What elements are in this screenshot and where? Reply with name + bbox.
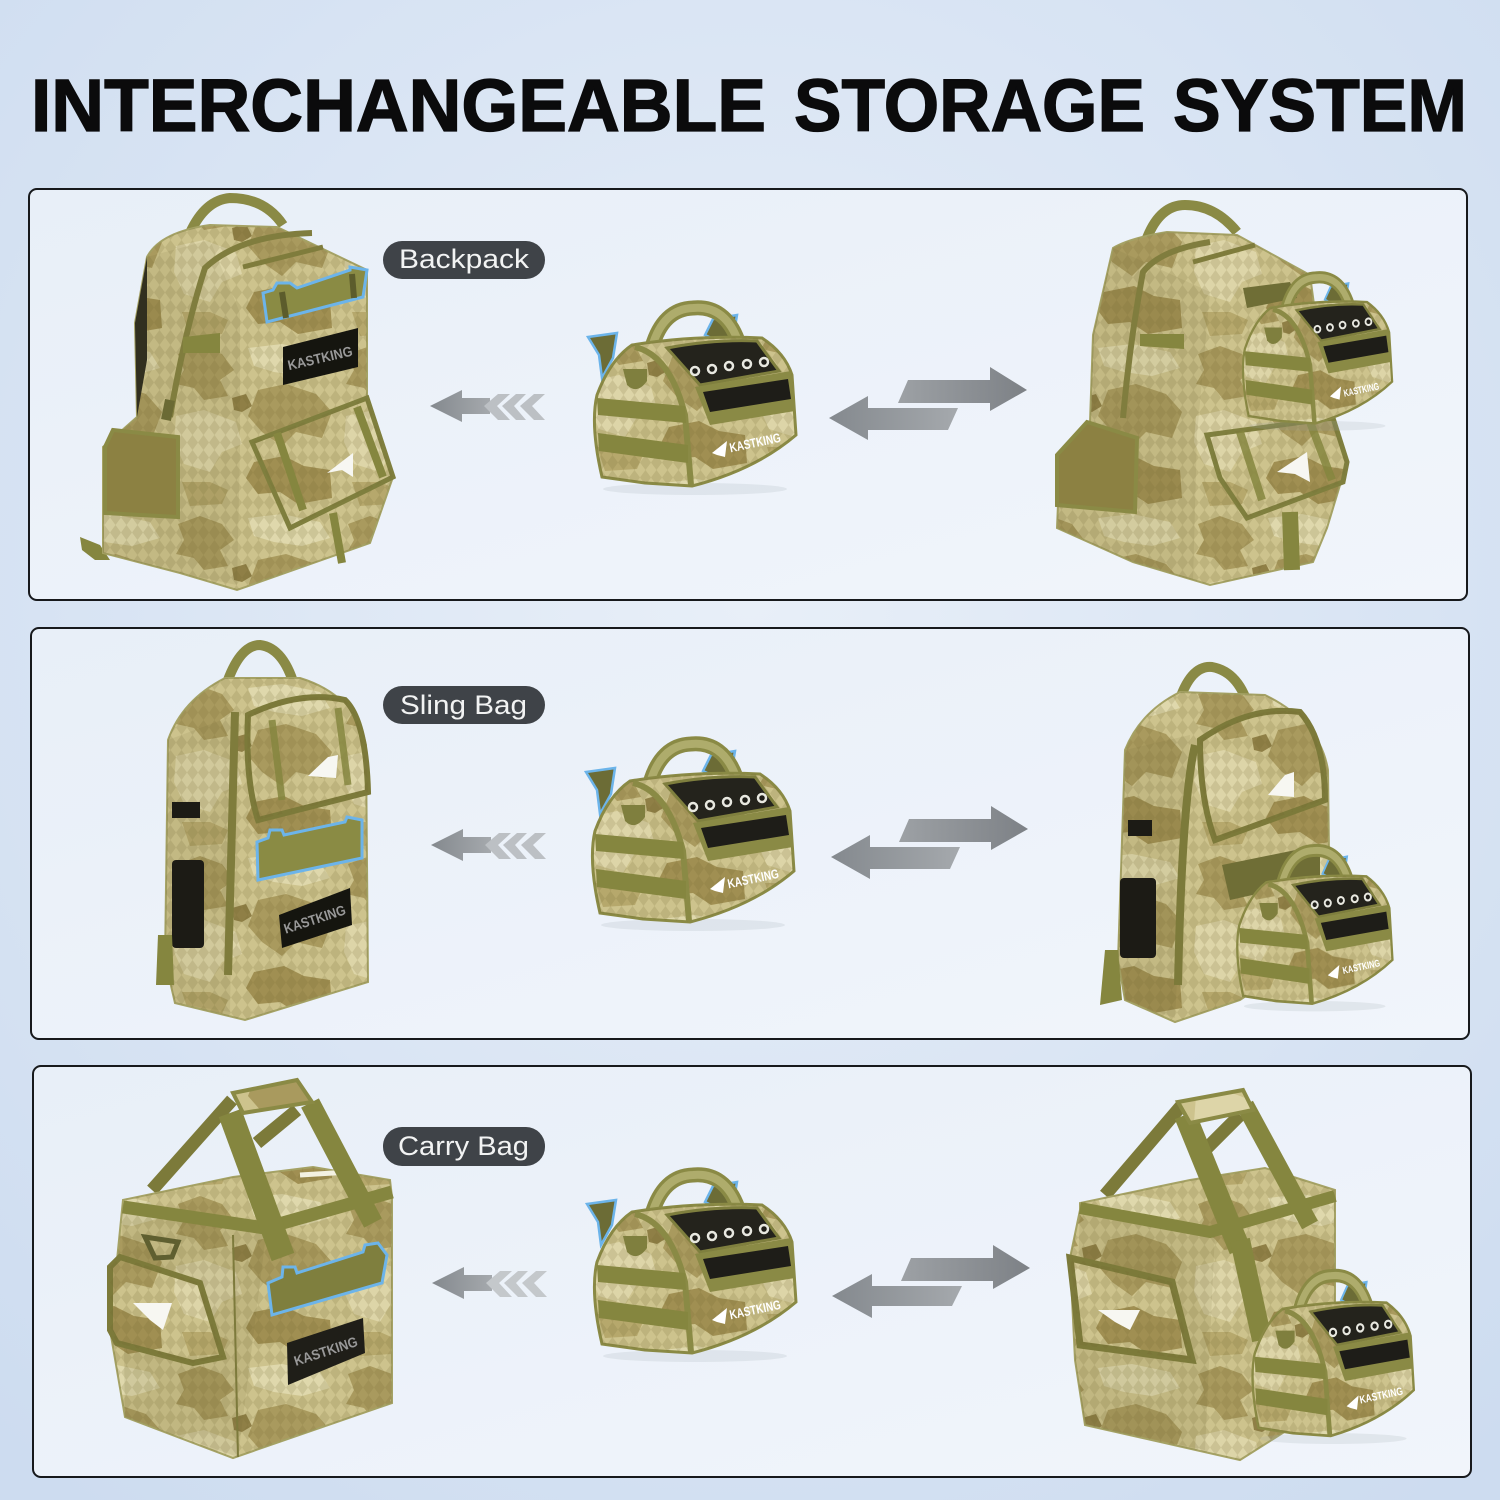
removable pouch: KASTKING [726,866,780,891]
sling bag with pouch attached [1100,667,1392,1022]
panel: sling bag [31,628,1469,1039]
sling bag before attaching [156,645,368,1020]
arrow: interchange [832,1245,1030,1318]
arrow: interchange [829,367,1027,440]
panel: carry bag [33,1066,1471,1477]
label: Carry Bag [383,1127,545,1166]
title: INTERCHANGEABLE [31,64,766,147]
title [31,64,1467,147]
backpack with pouch attached [1057,205,1392,585]
sling bag with pouch attached: KASTKING [1342,958,1381,977]
carry bag with pouch attached [1070,1090,1414,1460]
arrow: attach left [432,1267,547,1299]
backpack before attaching [80,198,393,590]
label: Backpack [383,241,545,279]
removable pouch [587,1175,796,1362]
title: SYSTEM [1173,64,1467,147]
label: Backpack: Backpack [399,244,530,274]
backpack with pouch attached: KASTKING [1343,381,1380,400]
carry bag before attaching: KASTKING [292,1333,360,1369]
removable pouch [588,308,796,495]
title: STORAGE [794,64,1145,147]
label: Carry Bag: Carry Bag [398,1131,529,1161]
arrow: interchange [831,806,1028,879]
carry bag before attaching [110,1080,392,1458]
sling bag before attaching: KASTKING [282,902,348,937]
removable pouch: KASTKING [728,430,782,455]
carry bag with pouch attached: KASTKING [1359,1386,1404,1407]
label: Sling Bag: Sling Bag [400,690,527,720]
removable pouch: KASTKING [728,1297,782,1322]
backpack before attaching: KASTKING [286,343,354,373]
arrow: attach left [430,390,545,422]
panel: backpack [29,189,1467,600]
removable pouch [586,744,794,931]
label: Sling Bag [383,686,545,724]
arrow: attach left [431,829,546,861]
